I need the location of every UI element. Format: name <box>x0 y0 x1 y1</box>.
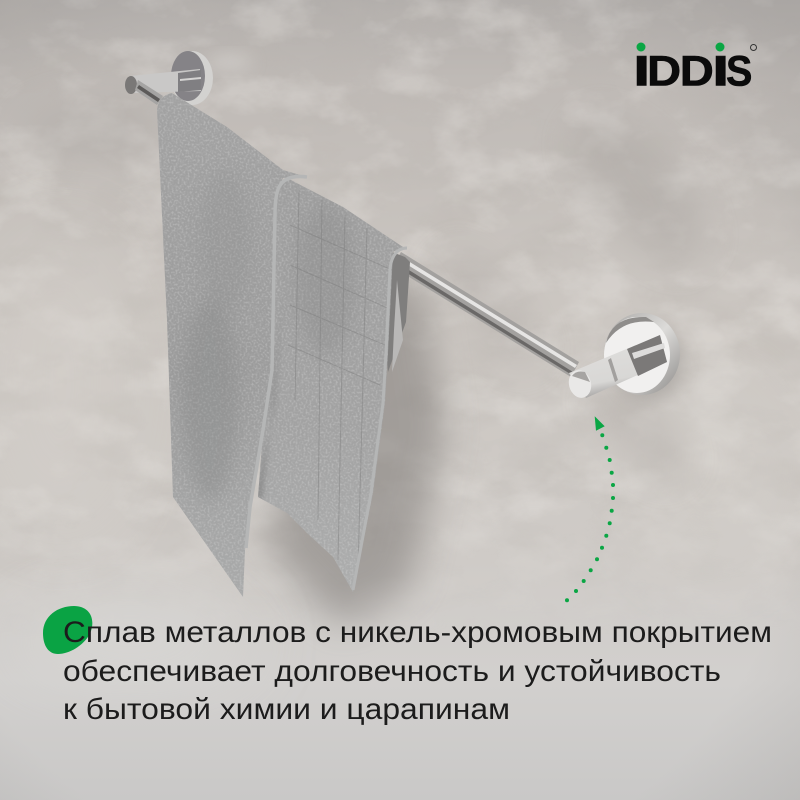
rail bar <box>393 252 579 377</box>
towel: front hem <box>246 176 307 548</box>
logo: IDDIS: I <box>633 48 650 95</box>
logo: IDDIS <box>633 42 756 95</box>
back towel fold <box>385 252 410 372</box>
green blob accent <box>43 606 92 654</box>
text: description: Сплав металлов с никель-хромовым покрытием <box>63 616 772 649</box>
logo: IDDIS: D <box>647 46 681 95</box>
arrow: dotted curved arrow to mount <box>565 416 615 602</box>
towel: back (right) <box>258 180 403 592</box>
logo: IDDIS: D <box>680 46 714 95</box>
towel: front (left) <box>157 93 299 597</box>
wall shine near left mount <box>208 54 252 70</box>
text: description: обеспечивает долговечность и устойчивость <box>63 655 721 688</box>
logo: IDDIS: I <box>712 48 729 95</box>
right wall mount <box>566 313 684 400</box>
text: description <box>63 616 772 726</box>
text: description: к бытовой химии и царапинам <box>63 693 510 726</box>
towel: back hem <box>353 248 407 590</box>
logo: IDDIS: S <box>726 47 752 95</box>
left wall mount <box>125 51 213 105</box>
towel shadow <box>265 270 445 625</box>
